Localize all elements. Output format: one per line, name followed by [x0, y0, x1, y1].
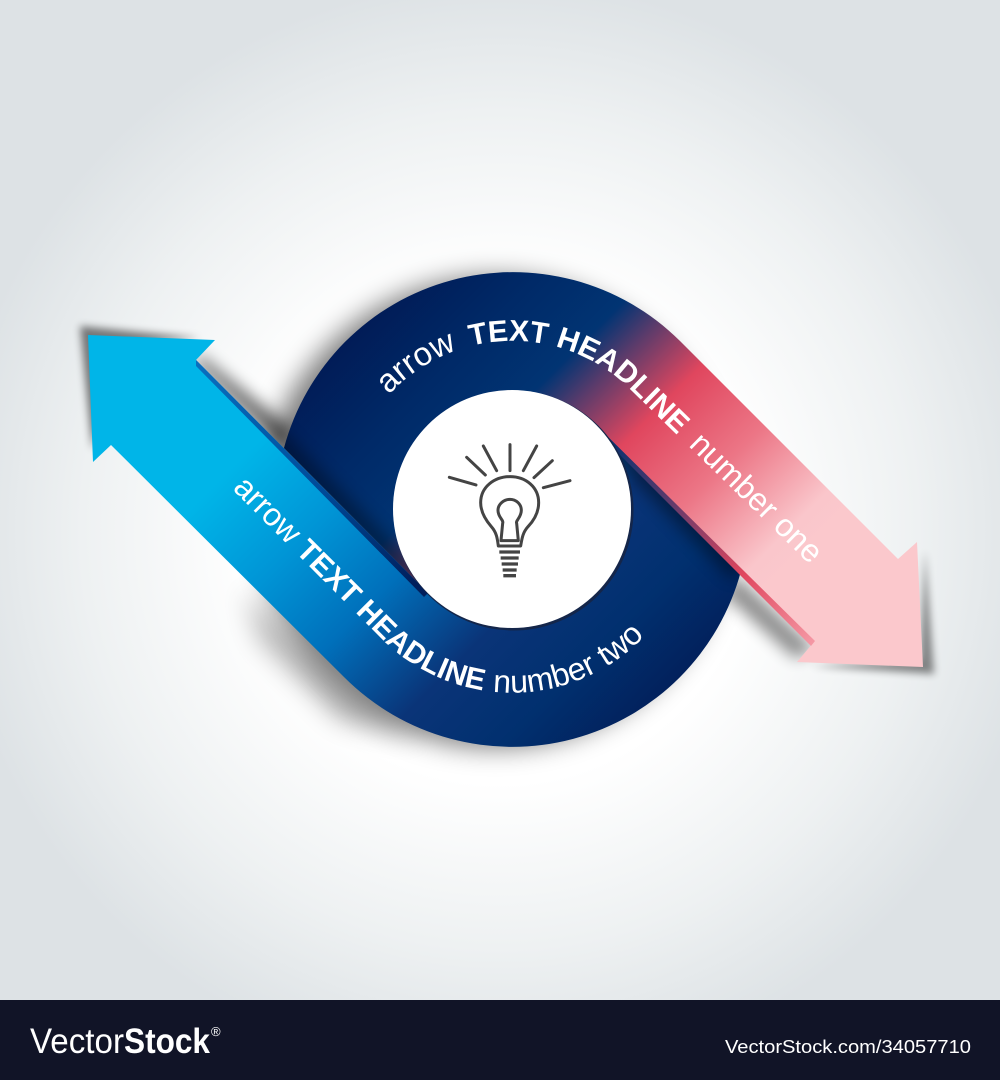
arrow one: navy ring top into pink arrow: [284, 272, 923, 667]
label: arrow text headline number one: arrow TEXT HEADLINE number one: [380, 320, 818, 562]
label: arrow text headline number two: arrow TEXT HEADLINE number two: [234, 480, 642, 693]
drop shadows under the arrows: [80, 276, 934, 748]
footer logo: Vector: [30, 1022, 124, 1061]
arrow two: cyan arrow into navy ring bottom: [88, 335, 741, 747]
fold strip on cyan arrow edge: [196, 360, 428, 597]
footer logo: ®: [211, 1024, 221, 1039]
central circle rim: [394, 390, 634, 630]
central white circle: [393, 390, 631, 628]
fold strip on pink arrow edge: [596, 429, 815, 646]
footer logo: [30, 1022, 221, 1061]
footer bar: [0, 1000, 1000, 1080]
footer logo: Stock: [124, 1022, 210, 1061]
shadows cast on the ring: [284, 427, 746, 582]
footer image id: VectorStock.com/34057710: [725, 1036, 971, 1057]
icon: light bulb: [449, 445, 570, 576]
